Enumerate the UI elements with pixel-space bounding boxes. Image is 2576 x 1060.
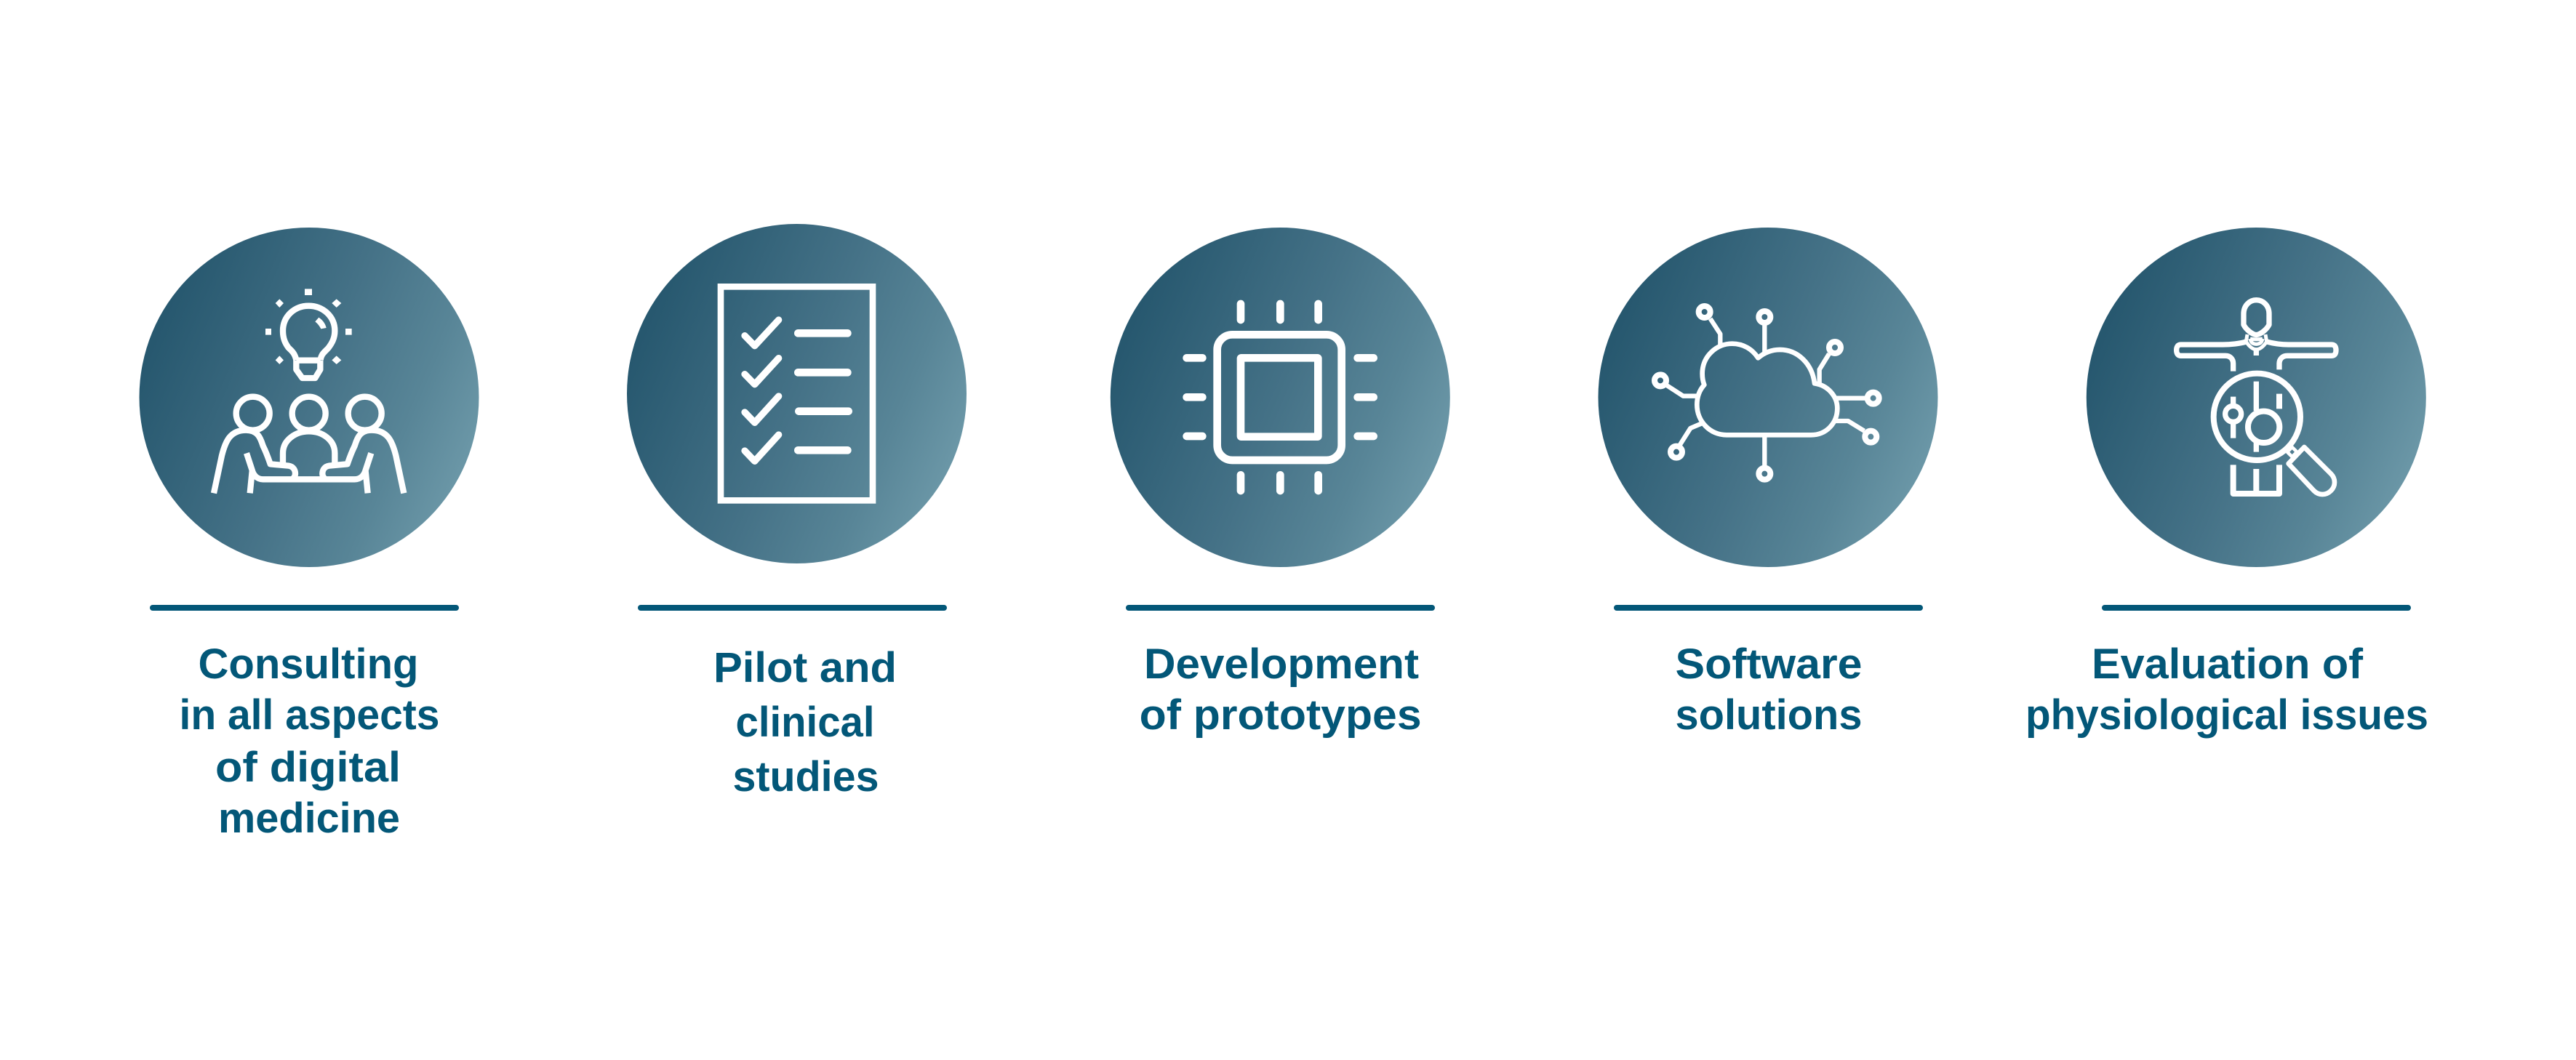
label: evaluation: physiological issues <box>2025 691 2428 739</box>
label: software: Software <box>1676 641 1862 688</box>
rule: evaluation <box>2102 605 2411 611</box>
label: pilot: studies <box>733 753 879 800</box>
label: prototypes: of prototypes <box>1140 691 1422 739</box>
label: pilot: Pilot and <box>713 644 897 691</box>
gradient circle: evaluation <box>2087 228 2426 567</box>
label: software: solutions <box>1676 691 1862 739</box>
gradient circle: consulting <box>140 228 479 567</box>
label: consulting: Consulting <box>198 641 419 688</box>
icon: body under magnifying glass <box>2177 300 2336 494</box>
rule: software <box>1614 605 1923 611</box>
rule: consulting <box>150 605 459 611</box>
panel: evaluation of physiological issues <box>2025 228 2428 739</box>
rule: pilot <box>638 605 947 611</box>
label: software <box>1676 641 1862 739</box>
label: consulting: medicine <box>218 795 400 842</box>
gradient circle: prototypes <box>1111 228 1450 567</box>
label: pilot: clinical <box>736 699 874 746</box>
icon: connected cloud <box>1655 306 1879 480</box>
label: evaluation <box>2025 641 2428 739</box>
panel: development of prototypes <box>1111 228 1450 739</box>
icon: microchip <box>1187 304 1374 491</box>
icon: checklist <box>721 286 873 500</box>
label: prototypes: Development <box>1144 641 1419 688</box>
gradient circle: software <box>1599 228 1937 567</box>
rule: prototypes <box>1126 605 1435 611</box>
panel: software solutions <box>1599 228 1937 739</box>
gradient circle: pilot <box>627 224 967 563</box>
panel: consulting <box>140 228 479 842</box>
label: evaluation: Evaluation of <box>2092 641 2364 688</box>
label: consulting <box>179 641 439 842</box>
label: prototypes <box>1140 641 1422 739</box>
label: consulting: in all aspects <box>179 691 439 739</box>
label: pilot <box>713 644 897 800</box>
panel: pilot and clinical studies <box>627 224 967 800</box>
label: consulting: of digital <box>215 744 401 791</box>
icon: people around a table with light bulb <box>214 289 404 493</box>
